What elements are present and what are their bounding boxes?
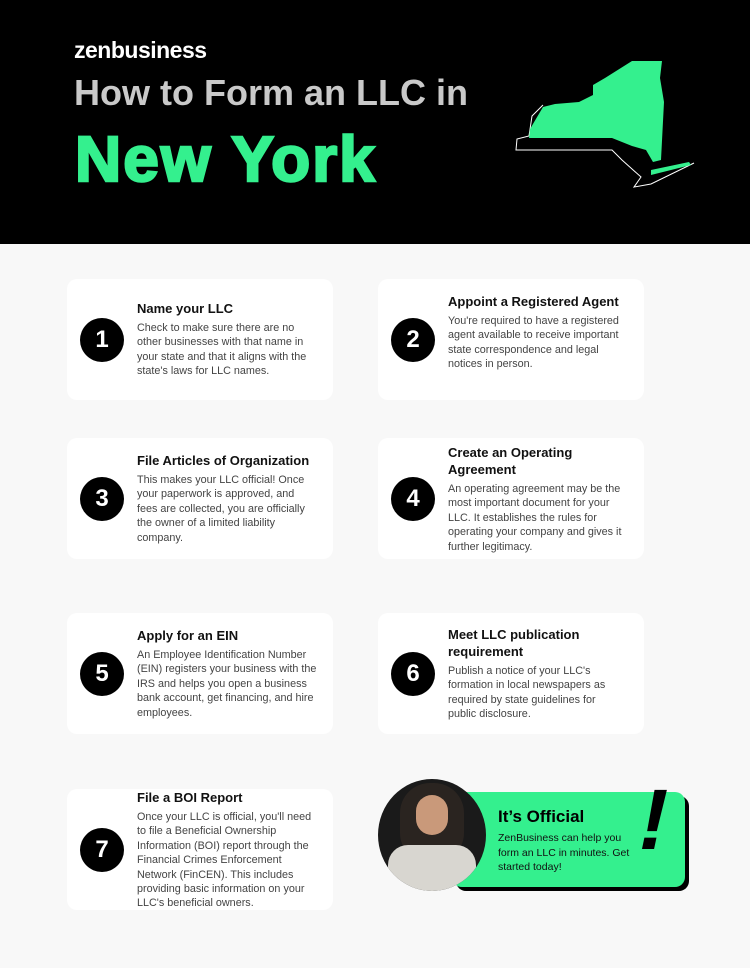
callout text: ZenBusiness can help you form an LLC in minutes. Get started today! — [498, 832, 629, 873]
callout box — [452, 792, 685, 887]
card 4 — [378, 438, 644, 559]
icon: New York map — [515, 61, 694, 188]
card 3: 3 — [95, 485, 109, 512]
card 3: File Articles of Organization — [137, 453, 309, 468]
logo: zenbusiness — [74, 37, 207, 63]
card 7: 7 — [95, 836, 109, 863]
card 1: 1 — [95, 326, 109, 353]
callout shadow — [456, 796, 689, 891]
card 1: Name your LLC — [137, 301, 233, 316]
card 6: Meet LLC publication requirement — [448, 627, 579, 659]
icon: exclamation: ! — [630, 772, 679, 868]
card 7: File a BOI Report — [137, 790, 242, 805]
callout: It's Official — [378, 772, 689, 891]
card 4: An operating agreement may be the most important document for your LLC. It establishes the rules for operating your company and gives it further legitimacy. — [448, 483, 621, 553]
card 1 — [67, 279, 333, 400]
card 5: 5 — [95, 660, 109, 687]
photo circle — [378, 779, 486, 891]
card 5: Apply for an EIN — [137, 628, 238, 643]
card 6: 6 — [406, 660, 420, 687]
title line 2: New York — [75, 123, 377, 195]
card 1: Check to make sure there are no other businesses with that name in your state and that it aligns with the state's laws for LLC names. — [137, 322, 306, 377]
card 7: Once your LLC is official, you'll need to file a Beneficial Ownership Information (BOI) report through the Financial Crimes Enforcement Network (FinCEN). This includes providing basic information on your LLC's beneficial owners. — [137, 811, 311, 909]
card 4: Create an Operating Agreement — [448, 445, 572, 477]
card 2 — [378, 279, 644, 400]
card 2: 2 — [406, 326, 420, 353]
card 6 — [378, 613, 644, 734]
card 3: This makes your LLC official! Once your paperwork is approved, and fees are collected, you are officially the owner of a limited liability company. — [137, 474, 305, 544]
card 2: You're required to have a registered agent available to receive important state correspondence and legal notices in person. — [448, 315, 619, 370]
card 5: An Employee Identification Number (EIN) registers your business with the IRS and helps you open a business bank account, get financing, and hire employees. — [137, 649, 316, 719]
header — [0, 0, 750, 244]
card 6: Publish a notice of your LLC's formation in local newspapers as required by state guidelines for public disclosure. — [448, 665, 605, 720]
title line 1: How to Form an LLC in — [74, 72, 468, 113]
card 7 — [67, 789, 333, 910]
card 4: 4 — [406, 485, 420, 512]
card 2: Appoint a Registered Agent — [448, 294, 619, 309]
card 3 — [67, 438, 333, 559]
callout heading: It’s Official — [498, 807, 584, 826]
card 5 — [67, 613, 333, 734]
